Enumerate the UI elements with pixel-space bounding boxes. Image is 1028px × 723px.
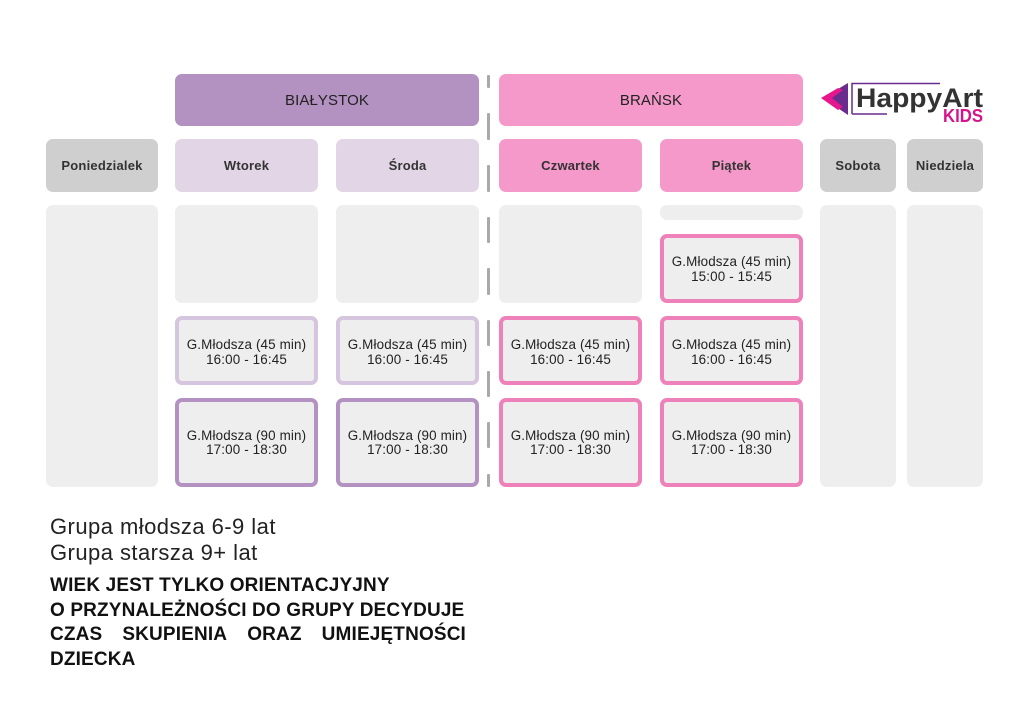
- class: Czwartek 16:00: 16:00 - 16:45: [530, 352, 611, 366]
- class: Piątek 16:00: 16:00 - 16:45: [691, 352, 772, 366]
- note: age is only indicative: [50, 575, 466, 670]
- class: Wtorek 16:00: G.Młodsza (45 min): [187, 336, 306, 352]
- logo: HappyArt Kids: KIDS: [943, 106, 983, 126]
- class: Piątek 16:00: G.Młodsza (45 min): [672, 336, 791, 352]
- day header: Wtorek: Wtorek: [224, 158, 269, 173]
- class: Piątek 17:00: [660, 398, 803, 487]
- heading: Białystok: [175, 74, 479, 126]
- day header: Niedziela: Niedziela: [916, 158, 974, 173]
- logo: HappyArt Kids: HappyArt: [856, 83, 983, 113]
- class: Czwartek 17:00: [499, 398, 642, 487]
- day header: Czwartek: [499, 139, 642, 192]
- class: Środa 17:00: [336, 398, 479, 487]
- class: Środa 17:00: 17:00 - 18:30: [367, 442, 448, 456]
- day header: Czwartek: Czwartek: [541, 158, 600, 173]
- day header: Środa: Środa: [389, 158, 426, 173]
- day header: Sobota: Sobota: [835, 158, 881, 173]
- day header: Poniedziałek: [46, 139, 158, 192]
- day header: Piątek: Piątek: [712, 158, 751, 173]
- note: age is only indicative: CZAS: [50, 624, 102, 645]
- class: Wtorek 17:00: 17:00 - 18:30: [206, 442, 287, 456]
- class: Czwartek 17:00: 17:00 - 18:30: [530, 442, 611, 456]
- legend: age groups: [50, 514, 276, 564]
- empty column: Niedziela: [907, 205, 983, 487]
- note: age is only indicative: SKUPIENIA: [122, 624, 227, 645]
- class: Czwartek 17:00: G.Młodsza (90 min): [511, 428, 630, 442]
- note: age is only indicative: O PRZYNALEŻNOŚCI DO GRUPY DECYDUJE: [50, 600, 464, 621]
- empty slot: Czwartek: [499, 205, 642, 303]
- class: Piątek 15:00: G.Młodsza (45 min): [672, 254, 791, 268]
- class: Czwartek 16:00: [499, 316, 642, 385]
- note: age is only indicative: WIEK JEST TYLKO ORIENTACJYJNY: [50, 575, 390, 596]
- class: Piątek 15:00: 15:00 - 15:45: [691, 268, 772, 284]
- class: Środa 16:00: [336, 316, 479, 385]
- empty slot: Środa: [336, 205, 479, 303]
- legend: age groups: Grupa młodsza 6-9 lat: [50, 514, 276, 539]
- class: Wtorek 16:00: 16:00 - 16:45: [206, 352, 287, 366]
- note: age is only indicative: ORAZ: [247, 624, 302, 645]
- class: Piątek 16:00: [660, 316, 803, 385]
- class: Piątek 15:00: [660, 234, 803, 303]
- empty column: Sobota: [820, 205, 896, 487]
- empty slot: Wtorek: [175, 205, 318, 303]
- class: Wtorek 16:00: [175, 316, 318, 385]
- day header: Wtorek: [175, 139, 318, 192]
- day header: Sobota: [820, 139, 896, 192]
- class: Czwartek 16:00: G.Młodsza (45 min): [511, 336, 630, 352]
- class: Wtorek 17:00: G.Młodsza (90 min): [187, 428, 306, 442]
- heading: Białystok: BIAŁYSTOK: [285, 92, 369, 108]
- heading: Brańsk: BRAŃSK: [620, 92, 682, 108]
- class: Środa 16:00: 16:00 - 16:45: [367, 352, 448, 366]
- logo: HappyArt Kids: [821, 82, 983, 126]
- class: Piątek 17:00: G.Młodsza (90 min): [672, 428, 791, 442]
- legend: age groups: Grupa starsza 9+ lat: [50, 540, 258, 564]
- class: Środa 16:00: G.Młodsza (45 min): [348, 336, 467, 352]
- day header: Niedziela: [907, 139, 983, 192]
- note: age is only indicative: UMIEJĘTNOŚCI: [322, 624, 466, 645]
- class: Wtorek 17:00: [175, 398, 318, 487]
- note: age is only indicative: DZIECKA: [50, 649, 136, 670]
- day header: Środa: [336, 139, 479, 192]
- heading: Brańsk: [499, 74, 803, 126]
- day header: Piątek: [660, 139, 803, 192]
- empty slot: Piątek: [660, 205, 803, 220]
- class: Środa 17:00: G.Młodsza (90 min): [348, 428, 467, 442]
- day header: Poniedziałek: Poniedzialek: [61, 158, 143, 173]
- class: Piątek 17:00: 17:00 - 18:30: [691, 442, 772, 456]
- empty column: Poniedziałek: [46, 205, 158, 487]
